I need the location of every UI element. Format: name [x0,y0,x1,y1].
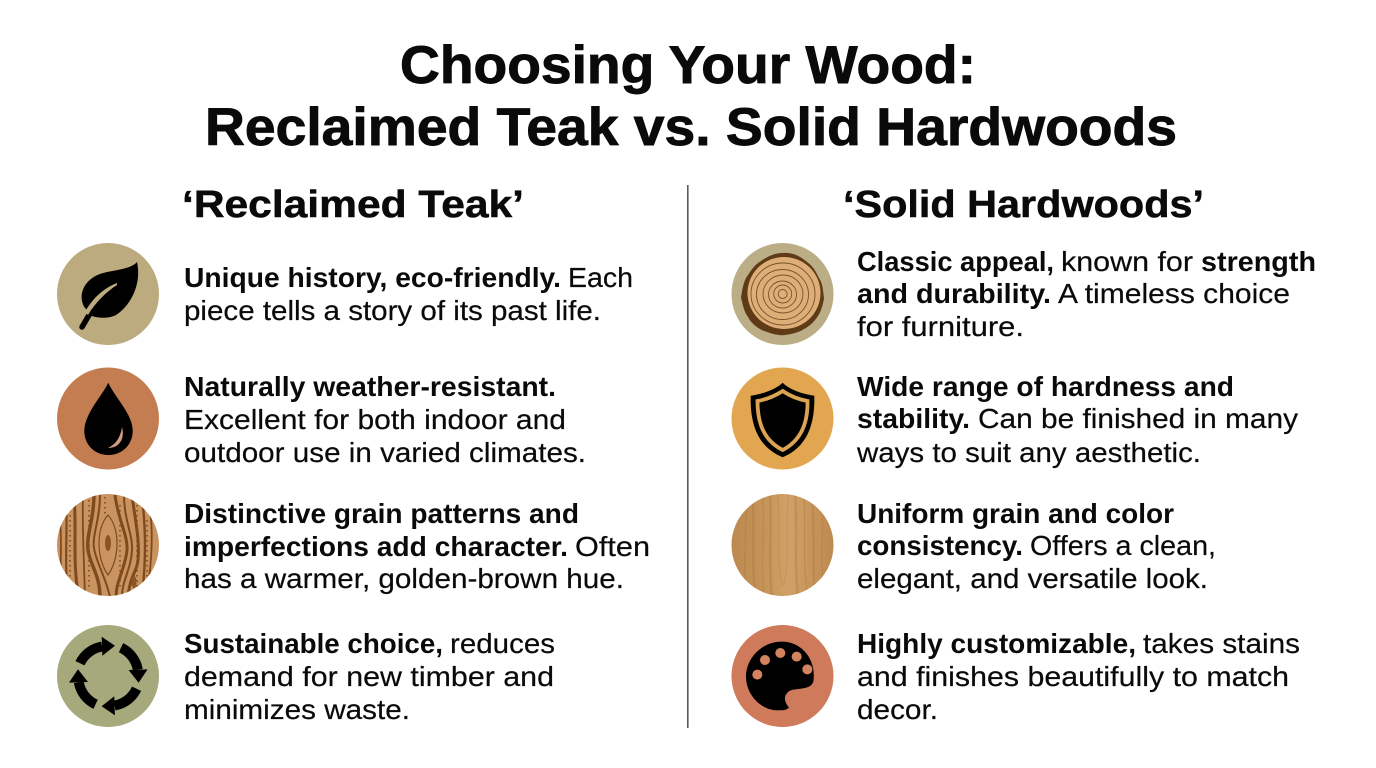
text: grain patterns: has a warmer, golden-brown hue. [184,563,624,594]
icon: water drop [57,368,159,470]
row: grain patterns [57,494,650,597]
row: customizable [732,625,1300,727]
icon: wood grain [57,494,159,597]
text: customizable: takes stains [1143,628,1300,659]
row: unique history [57,243,633,345]
text: uniform grain [857,498,1216,594]
text: grain patterns: Often [575,531,650,562]
text: sustainable: Sustainable choice, [184,628,443,659]
text: classic appeal: Classic appeal, [857,246,1054,277]
text: classic appeal: strength [1201,246,1316,277]
text: grain patterns [184,498,650,594]
row: uniform grain [732,494,1216,597]
text: classic appeal: and durability. [857,278,1051,309]
heading: reclaimed teak: ‘Reclaimed Teak’ [182,184,524,226]
divider [687,185,689,728]
text: classic appeal: known for [1061,246,1193,277]
icon: shield [732,368,834,470]
icon: recycle arrows [57,625,159,727]
text: weather resistant: outdoor use in varied climates. [184,437,586,468]
icon: tree rings [732,243,834,345]
text: sustainable: demand for new timber and [184,661,554,692]
text: uniform grain: elegant, and versatile look. [857,563,1208,594]
title: Choosing Your Wood: [400,36,976,95]
text: customizable: decor. [857,694,938,725]
text: hardness and stability: ways to suit any aesthetic. [856,437,1201,468]
text: unique history: Unique history, eco-friendly. [184,262,561,293]
row: classic appeal [732,243,1316,345]
text: unique history: Each [568,262,633,293]
heading: solid hardwoods: ‘Solid Hardwoods’ [843,184,1204,226]
icon: smooth wood [732,494,834,597]
text: hardness and stability: stability. [857,403,970,434]
text: classic appeal: A timeless choice [1058,278,1290,309]
text: customizable [857,628,1300,725]
text: customizable: Highly customizable, [857,628,1136,659]
text: customizable: and finishes beautifully to match [857,661,1289,692]
text: uniform grain: Offers a clean, [1030,530,1216,561]
text: sustainable: reduces [450,628,555,659]
row: weather resistant [57,368,586,470]
text: hardness and stability: Wide range of hardness and [857,371,1234,402]
text: weather resistant: Naturally weather-resistant. [184,371,556,402]
text: classic appeal [857,246,1316,342]
text: weather resistant [184,371,586,468]
panel: reclaimed teak [57,184,650,727]
text: unique history [184,262,633,326]
panel: solid hardwoods [732,184,1316,727]
text: hardness and stability: Can be finished in many [978,403,1298,434]
row: sustainable [57,625,555,727]
row: hardness and stability [732,368,1298,470]
text: sustainable [184,628,555,725]
text: classic appeal: for furniture. [857,311,1024,342]
text: weather resistant: Excellent for both indoor and [184,404,566,435]
title [205,36,1177,157]
title: Reclaimed Teak vs. Solid Hardwoods [205,98,1177,157]
icon: leaf [57,243,159,345]
text: uniform grain: consistency. [857,530,1023,561]
text: uniform grain: Uniform grain and color [857,498,1174,529]
text: grain patterns: imperfections add character. [184,531,568,562]
icon: paint palette [732,625,834,727]
text: unique history: piece tells a story of its past life. [184,295,601,326]
text: sustainable: minimizes waste. [184,694,410,725]
text: hardness and stability [856,371,1298,468]
text: grain patterns: Distinctive grain patterns and [184,498,579,529]
